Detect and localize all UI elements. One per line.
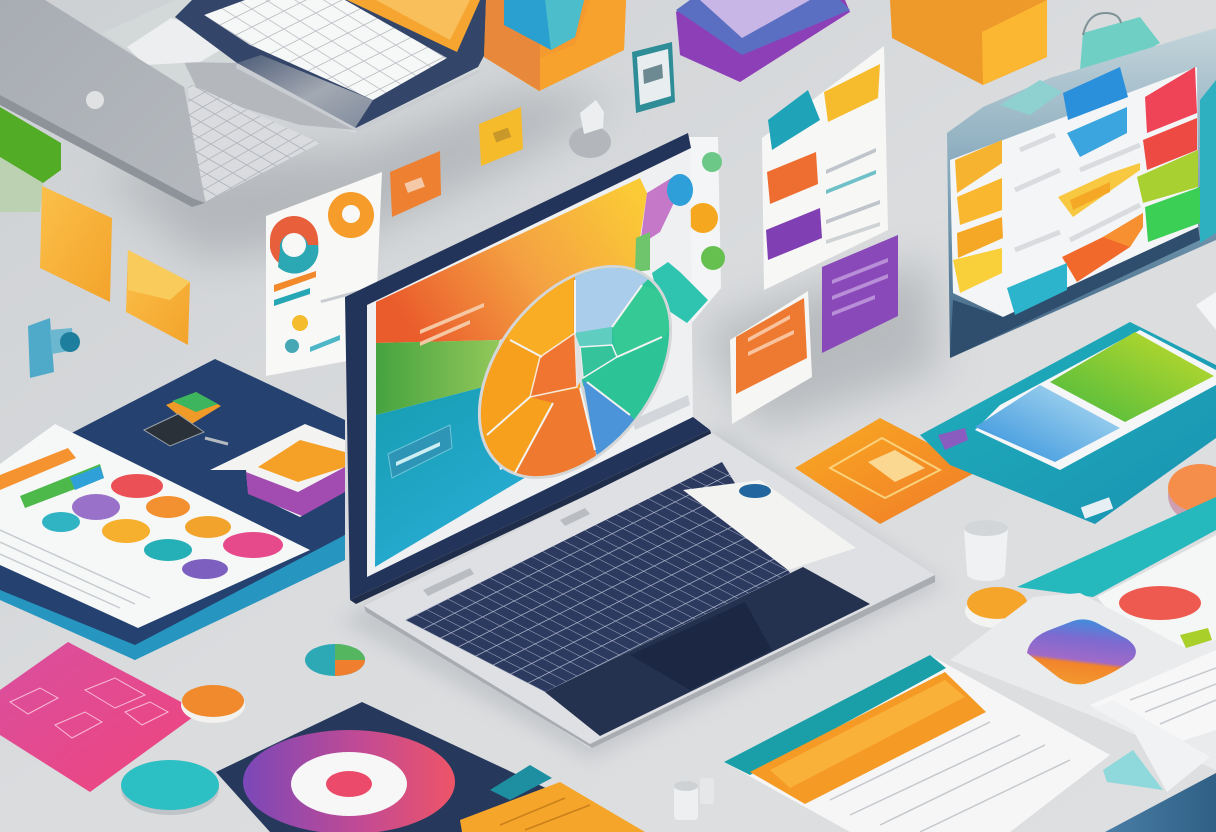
icon cards: top centre	[390, 100, 611, 217]
document: right column list	[762, 46, 888, 290]
teal bell shape	[652, 262, 708, 323]
card: purple note	[822, 235, 898, 353]
box: orange top right	[890, 0, 1047, 85]
package on tablet	[210, 424, 345, 517]
box: purple top	[676, 0, 850, 82]
laptop: main	[340, 133, 945, 760]
mini devices on tablet	[144, 392, 228, 446]
document: bottom orange banner	[724, 655, 1110, 832]
panel: right kanban board	[947, 13, 1216, 358]
icon: small camera	[28, 318, 80, 378]
card: orange sheet bottom	[460, 782, 645, 832]
laptop screen	[362, 148, 693, 580]
documents: bottom right	[950, 497, 1216, 832]
small cylinders	[674, 778, 714, 820]
cube: orange top	[484, 0, 626, 91]
background shadows	[100, 90, 940, 430]
laptop: top open	[102, 0, 514, 133]
button: teal disc	[121, 760, 219, 815]
paper stub right edge	[1196, 292, 1216, 330]
document: charts sheet	[266, 172, 382, 376]
notes: left sticky cards	[0, 107, 190, 345]
button: orange disc small	[965, 587, 1029, 628]
paper on keyboard	[683, 480, 856, 570]
card: orange document	[730, 291, 812, 424]
trackpad and palm rest	[545, 567, 870, 736]
target dial panel	[216, 702, 552, 832]
laptop: top-left silver	[0, 0, 320, 207]
laptop base	[364, 433, 935, 748]
tablet: right teal	[920, 322, 1216, 524]
button: orange disc left	[181, 685, 245, 723]
card: small teal	[632, 42, 675, 113]
keyboard	[405, 462, 790, 692]
laptop lid frame	[345, 133, 712, 604]
card: orange tile	[795, 418, 980, 524]
cup	[964, 520, 1008, 581]
pie chart	[478, 265, 672, 479]
button: multicolour disc	[305, 644, 365, 676]
tablet: left with buttons	[0, 359, 345, 660]
card: icon sheet behind laptop	[660, 137, 725, 325]
card: pink	[0, 642, 200, 792]
accent: orange disc right edge	[1168, 464, 1216, 523]
